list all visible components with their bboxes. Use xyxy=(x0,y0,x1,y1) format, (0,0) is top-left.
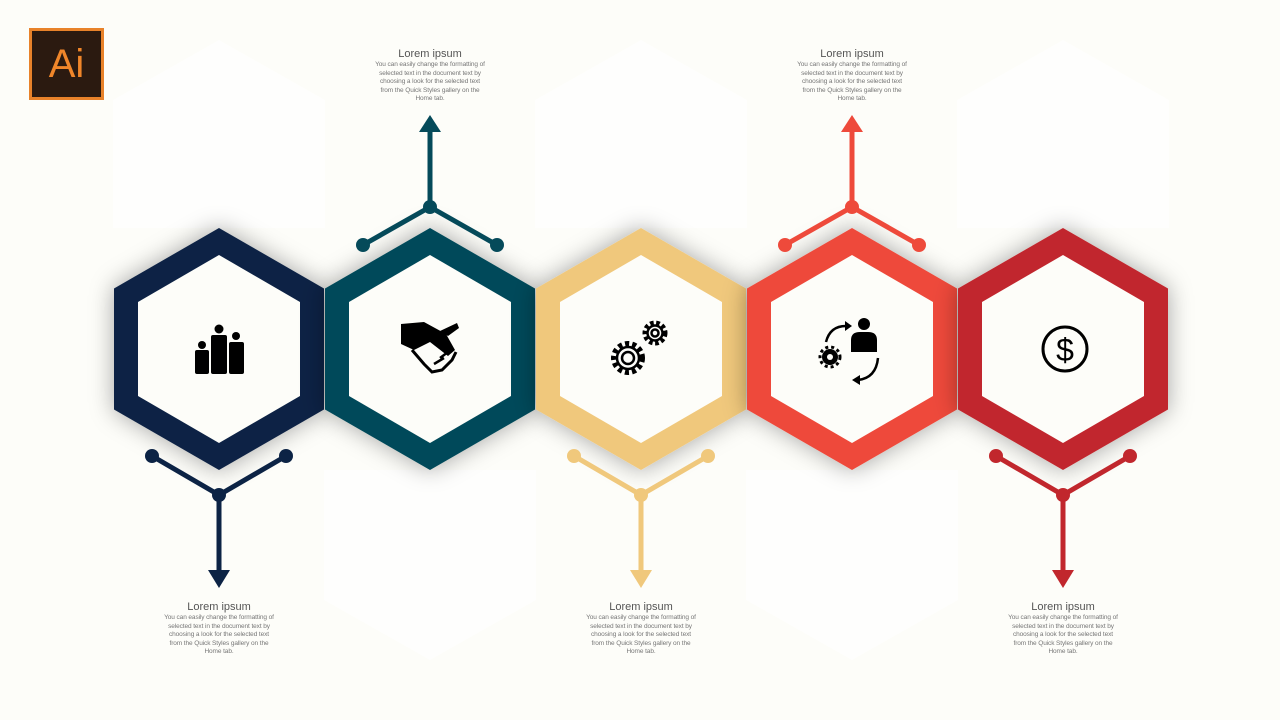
text block 2 top: Lorem ipsum xyxy=(398,48,462,60)
text block 2 top: You can easily change the formatting of selected text in the document text by choosing a look for the selected text from the Quick Styles gallery on the Home tab. xyxy=(375,61,485,102)
icon: people group xyxy=(195,324,244,374)
text block 4 top: You can easily change the formatting of selected text in the document text by choosing a look for the selected text from the Quick Styles gallery on the Home tab. xyxy=(797,61,907,102)
hexagon 2 teal xyxy=(325,228,535,470)
connector 1 down arrow xyxy=(145,449,293,588)
icon: gear person cycle xyxy=(820,318,878,385)
icon: dollar xyxy=(1043,327,1087,371)
icon: gears xyxy=(614,323,665,372)
text block 5 bottom: You can easily change the formatting of selected text in the document text by choosing a look for the selected text from the Quick Styles gallery on the Home tab. xyxy=(1008,614,1118,655)
hexagon 3 yellow xyxy=(536,228,746,470)
text block 1 bottom: You can easily change the formatting of selected text in the document text by choosing a look for the selected text from the Quick Styles gallery on the Home tab. xyxy=(164,614,274,655)
hexagon 5 red xyxy=(958,228,1168,470)
logo: Ai: Ai xyxy=(49,42,84,86)
hexagon 1 navy xyxy=(114,228,324,470)
logo: Ai xyxy=(29,28,104,100)
connector 4 up arrow xyxy=(778,115,926,252)
background faint hexagon pattern xyxy=(113,40,1169,660)
hexagon 4 orange-red xyxy=(747,228,957,470)
text block 1 bottom: Lorem ipsum xyxy=(187,601,251,613)
text block 4 top: Lorem ipsum xyxy=(820,48,884,60)
text block 3 bottom: Lorem ipsum xyxy=(609,601,673,613)
icon: handshake xyxy=(401,322,459,372)
text block 5 bottom: Lorem ipsum xyxy=(1031,601,1095,613)
connector 2 up arrow xyxy=(356,115,504,252)
icon: dollar: $ xyxy=(1056,332,1074,368)
connector 3 down arrow xyxy=(567,449,715,588)
text block 3 bottom: You can easily change the formatting of selected text in the document text by choosing a look for the selected text from the Quick Styles gallery on the Home tab. xyxy=(586,614,696,655)
connector 5 down arrow xyxy=(989,449,1137,588)
